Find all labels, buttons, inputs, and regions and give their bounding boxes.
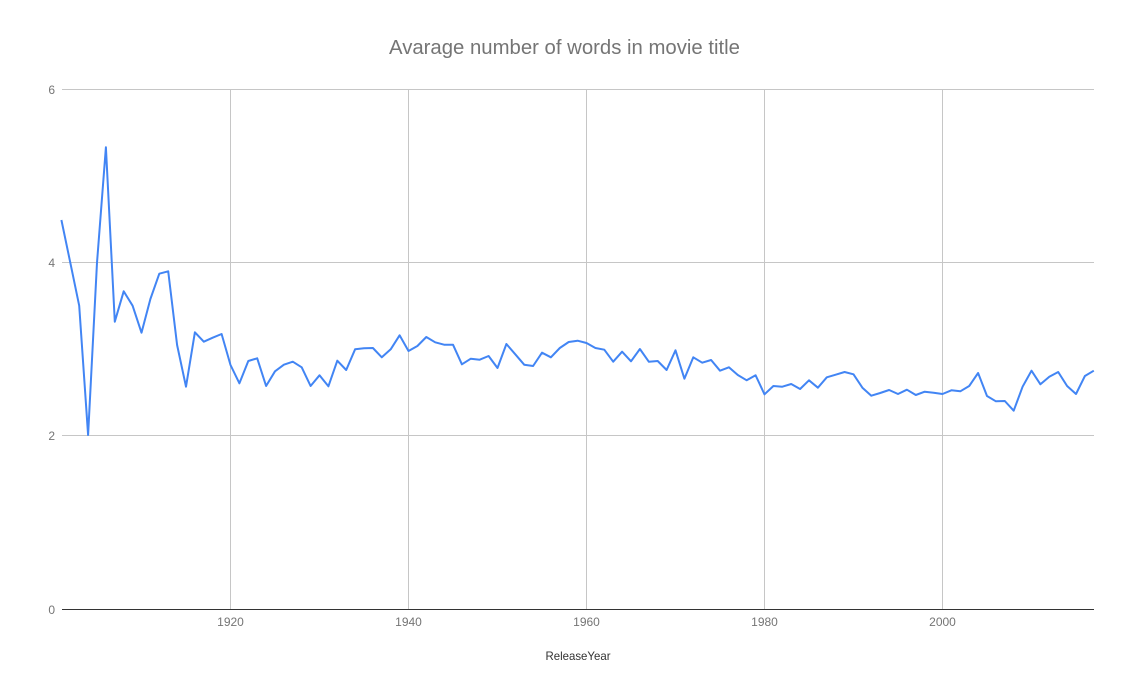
- title: Avarage number of words in movie title: [389, 37, 740, 59]
- y axis labels: 4: [48, 256, 55, 270]
- x axis baseline: [62, 608, 1094, 610]
- y axis labels: 6: [48, 83, 55, 97]
- x axis labels: 1960: [573, 615, 600, 629]
- x axis labels: [217, 615, 956, 629]
- x axis title: ReleaseYear: [546, 649, 610, 663]
- y axis labels: 2: [48, 429, 55, 443]
- x axis labels: 1940: [395, 615, 422, 629]
- x axis labels: 1980: [751, 615, 778, 629]
- x axis labels: 2000: [929, 615, 956, 629]
- data line: [61, 147, 1094, 435]
- y axis labels: [48, 83, 55, 617]
- y axis labels: 0: [48, 603, 55, 617]
- x axis labels: 1920: [217, 615, 244, 629]
